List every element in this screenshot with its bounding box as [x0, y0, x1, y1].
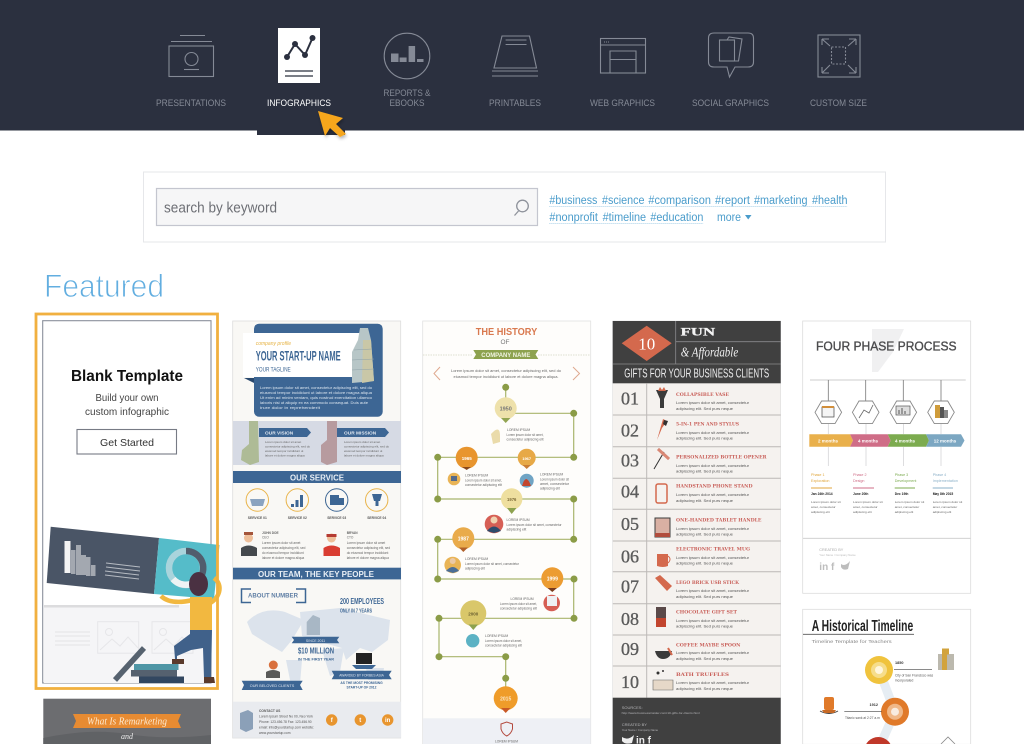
- icon: reports and ebooks: [384, 33, 430, 79]
- timeline captions: amet, consectetur: [540, 482, 570, 486]
- icon: custom size: [818, 35, 860, 77]
- label: web graphics: WEB GRAPHICS: [590, 98, 655, 109]
- keyword tags: #business: [549, 195, 598, 207]
- team band: OUR TEAM, THE KEY PEOPLE: [258, 570, 375, 579]
- historical timeline title: Timeline Template for Teachers: [812, 639, 893, 644]
- icon: printables: [492, 36, 538, 76]
- hero panel: irure dolor in reprehenderit: [260, 406, 320, 410]
- row descriptions: Lorem ipsum dolor sit amet, consectetur: [676, 431, 750, 435]
- timeline captions: Lorem ipsum dolor sit amet,: [506, 433, 544, 437]
- timeline captions: LOREM IPSUM: [465, 474, 488, 478]
- phase columns: adipiscing elit: [853, 510, 872, 514]
- timeline captions: LOREM IPSUM: [510, 597, 534, 601]
- phase columns: Implementation: [933, 479, 958, 483]
- four phase title: FOUR PHASE PROCESS: [816, 339, 957, 354]
- four phase footer: CREATED BY: [819, 548, 844, 552]
- search field: [156, 188, 538, 226]
- team members: labore et dolore magna aliqua: [262, 556, 304, 560]
- hero panel: [243, 324, 383, 417]
- row descriptions: Lorem ipsum dolor sit amet, consectetur: [676, 589, 750, 593]
- year pins: 1950: [500, 406, 512, 412]
- row descriptions: Lorem ipsum dolor sit amet, consectetur: [676, 651, 750, 655]
- phase columns: amet, consectetur: [853, 505, 878, 509]
- phase columns: Design: [853, 479, 864, 483]
- statistic: ten million: IN THE FIRST YEAR: [298, 658, 334, 662]
- phase columns: [811, 473, 962, 514]
- label: infographics: INFOGRAPHICS: [267, 98, 331, 109]
- row descriptions: Lorem ipsum dolor sit amet, consectetur: [676, 619, 750, 623]
- phase icons: [810, 380, 966, 424]
- timeline captions: LOREM IPSUM: [540, 472, 563, 476]
- phase columns: May 8th 2015: [933, 492, 953, 496]
- vision and mission band: consectetur adipiscing elit, sed do: [344, 444, 389, 448]
- row descriptions: adipiscing elit. Sed purs neque: [676, 532, 733, 536]
- timeline captions: consectetur adipiscing elit: [500, 606, 537, 610]
- hero panel: YOUR TAGLINE: [256, 368, 291, 374]
- service icons: [246, 489, 388, 520]
- statistic: employees: 200 EMPLOYEES: [340, 597, 384, 606]
- card: four phase process: [803, 321, 971, 593]
- historical timeline title: [803, 618, 914, 644]
- statistic: ten million: $10 MILLION: [298, 646, 334, 655]
- year pins: 1999: [547, 576, 558, 582]
- card: start-up infographic: [233, 321, 401, 738]
- gifts footer: CREATED BY: [622, 722, 647, 727]
- timeline captions: Lorem ipsum dolor sit amet,: [500, 602, 537, 606]
- ribbon: beloved clients: OUR BELOVED CLIENTS: [250, 684, 295, 688]
- event: 1912: Titanic sank at 2:27 a.m: [845, 716, 880, 720]
- service icons: SERVICE 01: [248, 516, 267, 520]
- row numbers: 04: [621, 482, 639, 502]
- four phase footer: in f: [819, 562, 835, 573]
- world map: [247, 608, 390, 690]
- row numbers: 01: [621, 388, 639, 408]
- gifts footer: Your Name / Company Name: [622, 728, 659, 732]
- vision and mission band: [233, 421, 401, 465]
- get started button: [77, 430, 176, 454]
- search panel: [144, 172, 886, 242]
- phase duration arrow bar: [809, 424, 964, 466]
- contact footer: email: info@yourstartup.com website:: [259, 726, 314, 730]
- row descriptions: Lorem ipsum dolor sit amet, consectetur: [676, 681, 750, 685]
- event: 1912: 1912: [870, 703, 878, 707]
- icon: infographics selected: [278, 28, 320, 83]
- icon: web graphics: [600, 38, 646, 73]
- row titles: COFFEE MAYBE SPOON: [676, 643, 741, 649]
- timeline captions: Lorem ipsum dolor sit: [540, 478, 569, 482]
- event: 1850: [894, 648, 954, 682]
- row numbers: 10: [621, 672, 639, 692]
- contact footer: in: [385, 718, 391, 724]
- row descriptions: Lorem ipsum dolor sit amet, consectetur: [676, 493, 750, 497]
- icon: social graphics: [708, 33, 754, 77]
- timeline captions: adipiscing elit: [506, 528, 526, 532]
- phase columns: amet, consectetur: [933, 505, 957, 509]
- row titles: [676, 392, 767, 678]
- phase columns: Phase 2: [853, 473, 867, 477]
- row titles: ELECTRONIC TRAVEL MUG: [676, 547, 750, 553]
- team band: [233, 568, 401, 579]
- year pins: [452, 397, 563, 713]
- history heading: Lorem ipsum dolor sit amet, consectetur adipiscing elit, sed do: [451, 369, 561, 373]
- timeline path: [434, 384, 578, 698]
- timeline captions: Lorem ipsum dolor sit amet, consectetur: [506, 523, 562, 527]
- keyword tags: #report: [715, 195, 751, 207]
- phase columns: Phase 4: [933, 473, 946, 477]
- our service band: [233, 471, 401, 483]
- year pins: 1976: [507, 497, 517, 502]
- service icons: SERVICE 02: [288, 516, 307, 520]
- timeline ribbon and circles: [864, 656, 909, 744]
- row descriptions: adipiscing elit. Sed purs neque: [676, 657, 733, 661]
- card: remarketing template: and: [121, 732, 134, 741]
- phase columns: Dec 19th: [895, 492, 908, 496]
- illustration: shelf: [44, 605, 210, 683]
- row descriptions: Lorem ipsum dolor sit amet, consectetur: [676, 401, 750, 405]
- row numbers: 02: [621, 421, 639, 441]
- statistic: employees: [340, 597, 384, 614]
- row grid: [613, 383, 781, 698]
- timeline captions: LOREM IPSUM: [485, 634, 508, 638]
- row titles: COLLAPSIBLE VASE: [676, 392, 729, 398]
- four phase footer: [803, 538, 970, 573]
- phase duration arrow bar: 12 months: [934, 438, 957, 444]
- gifts header: & Affordable: [681, 346, 738, 361]
- search placeholder: search by keyword: [164, 200, 277, 216]
- phase columns: adipiscing elit: [895, 510, 913, 514]
- contact footer: Phone: 123.456.78 Fax: 123.456.90: [259, 720, 312, 724]
- timeline portraits: [444, 429, 560, 647]
- statistic: ten million: [292, 615, 339, 662]
- contact footer: f: [331, 718, 334, 724]
- card: ten gifts: [613, 321, 781, 744]
- team members: BRYAN: [347, 531, 358, 535]
- illustration: dashboard panel: [47, 527, 220, 599]
- illustration: books and stick: [115, 648, 184, 683]
- gifts footer: SOURCES:: [622, 705, 643, 710]
- keyword tags: more: [717, 212, 741, 224]
- timeline captions: LOREM IPSUM: [506, 518, 530, 522]
- row titles: PERSONALIZED BOTTLE OPENER: [676, 455, 767, 461]
- gifts header: FUN: [681, 325, 716, 339]
- card: blank template: [43, 321, 220, 683]
- row descriptions: adipiscing elit. Sed purs neque: [676, 562, 733, 566]
- team members: do eiusmod tempor incididunt: [347, 551, 388, 555]
- label: custom size: CUSTOM SIZE: [810, 98, 867, 109]
- gifts footer: http://www.businessinsider.com/10-gifts-for-clients.html: [622, 711, 700, 715]
- history heading: THE HISTORY: [476, 326, 537, 338]
- ribbon: awarded: AS THE MOST PROMISING: [340, 681, 383, 685]
- phase columns: Exploration: [811, 479, 829, 483]
- statistic: ten million: SINCE 2011: [306, 639, 325, 643]
- gifts header: GIFTS FOR YOUR BUSINESS CLIENTS: [624, 366, 769, 381]
- history heading: [423, 326, 590, 380]
- hero panel: YOUR START-UP NAME: [256, 348, 341, 364]
- label: reports and ebooks: [384, 88, 431, 109]
- service icons: SERVICE 03: [327, 516, 346, 520]
- gifts header: 10: [638, 334, 655, 354]
- team members: JOHN DOE: [262, 531, 279, 535]
- row titles: LEGO BRICK USB STICK: [676, 580, 740, 586]
- timeline captions: [465, 428, 570, 648]
- row numbers: 08: [621, 609, 639, 629]
- row descriptions: adipiscing elit. Sed purs neque: [676, 595, 733, 599]
- gifts footer: [613, 698, 781, 744]
- event: 1850: City of San Francisco was: [895, 674, 933, 678]
- card: remarketing template: What Is Remarketing: [87, 716, 167, 728]
- label: printables: PRINTABLES: [489, 98, 541, 109]
- row descriptions: adipiscing elit. Sed purs neque: [676, 687, 733, 691]
- icon: house: [941, 737, 955, 744]
- hero panel: laboris nisi ut aliquip ex ea commodo consequat. Duis aute: [260, 401, 368, 405]
- row numbers: 06: [621, 546, 639, 566]
- hero panel: eiusmod tempor incididunt ut labore et dolore magna aliqua: [260, 391, 372, 395]
- vision and mission band: consectetur adipiscing elit, sed do: [265, 444, 310, 448]
- year pins: 2000: [468, 612, 479, 616]
- row descriptions: Lorem ipsum dolor sit amet, consectetur: [676, 556, 750, 560]
- team members: consectetur adipiscing elit, sed: [262, 546, 306, 550]
- vision and mission band: eiusmod tempor incididunt ut: [265, 449, 304, 453]
- row descriptions: Lorem ipsum dolor sit amet, consectetur: [676, 527, 750, 531]
- label: social graphics: SOCIAL GRAPHICS: [692, 98, 769, 109]
- heading: featured: Featured: [44, 268, 164, 304]
- year pins: 1967: [522, 456, 532, 461]
- row descriptions: adipiscing elit. Sed purs neque: [676, 499, 733, 503]
- gifts header: [613, 321, 781, 383]
- get started button: Get Started: [100, 437, 154, 449]
- vision and mission band: OUR VISION: [265, 430, 294, 436]
- ribbon: awarded: START-UP OF 2012: [347, 686, 377, 690]
- row titles: CHOCOLATE GIFT SET: [676, 609, 737, 615]
- orange selection frame: [36, 314, 218, 688]
- ribbon: awarded: [332, 653, 392, 690]
- row numbers: 03: [621, 451, 639, 471]
- team members: do eiusmod tempor incididunt: [262, 551, 304, 555]
- contact footer: www.yourstartup.com: [259, 731, 291, 735]
- row titles: HANDSTAND PHONE STAND: [676, 484, 752, 490]
- label: reports and ebooks: REPORTS &: [384, 88, 431, 99]
- row numbers: [621, 388, 639, 692]
- statistic: employees: ONLY IN 7 YEARS: [340, 608, 372, 614]
- phase columns: Jan 24th 2014: [811, 492, 833, 496]
- phase duration arrow bar: 4 months: [858, 438, 878, 444]
- arrow: orange cursor: [318, 111, 346, 137]
- phase columns: amet, consectetur: [811, 505, 836, 509]
- service icons: SERVICE 04: [367, 516, 386, 520]
- row titles: BATH TRUFFLES: [676, 672, 730, 678]
- team members: CEO: [262, 536, 269, 540]
- shield footer: [495, 722, 518, 744]
- year pins: 1965: [462, 456, 472, 461]
- ribbon: beloved clients: [242, 660, 303, 690]
- header bar: [0, 0, 1024, 135]
- event: 1850: 1850: [895, 661, 903, 665]
- history heading: eiusmod tempor incididunt ut labore et dolore magna aliqua.: [454, 375, 558, 379]
- label: reports and ebooks: EBOOKS: [390, 98, 424, 109]
- timeline captions: LOREM IPSUM: [507, 428, 530, 432]
- blank template description: [85, 392, 169, 418]
- event: 1850: incorporated: [895, 678, 913, 682]
- hero panel: company profile: [256, 341, 291, 347]
- phase columns: amet, consectetur: [895, 505, 919, 509]
- keyword tags: [549, 195, 848, 224]
- blank template description: Build your own: [96, 392, 159, 404]
- team members: CTO: [347, 536, 354, 540]
- phase duration arrow bar: 2 months: [818, 438, 838, 444]
- hero panel: Ut enim ad minim veniam, quis nostrud exercitation ullamco: [260, 396, 372, 400]
- team members: consectetur adipiscing elit, sed: [347, 546, 390, 550]
- vision and mission band: labore et dolore magna aliqua: [344, 454, 384, 458]
- hero panel: Lorem ipsum dolor sit amet, consectetur adipiscing elit, sed do: [260, 386, 372, 390]
- vision and mission band: eiusmod tempor incididunt ut: [344, 449, 383, 453]
- phase duration arrow bar: 4 months: [895, 438, 915, 444]
- vision and mission band: Lorem ipsum dolor sit amet: [344, 440, 380, 444]
- phase columns: Phase 1: [811, 473, 825, 477]
- year pins: 1987: [458, 536, 469, 542]
- row titles: 5-IN-1 PEN AND STYLUS: [676, 421, 739, 427]
- history heading: OF: [500, 339, 510, 346]
- keyword tags: #nonprofit: [549, 212, 599, 224]
- vision and mission band: Lorem ipsum dolor sit amet: [265, 440, 301, 444]
- team members: labore et dolore magna aliqua: [347, 556, 389, 560]
- row descriptions: [676, 401, 750, 691]
- ribbon: awarded: AWARDED BY FORBES ASIA: [339, 674, 385, 678]
- contact footer: t: [359, 718, 361, 724]
- timeline captions: consectetur adipiscing elit: [506, 438, 544, 442]
- team members: [241, 531, 390, 560]
- phase columns: June 20th: [853, 492, 868, 496]
- team members: Lorem ipsum dolor sit amet: [262, 541, 301, 545]
- row numbers: 05: [621, 514, 639, 534]
- row descriptions: Lorem ipsum dolor sit amet, consectetur: [676, 464, 750, 468]
- phase columns: adipiscing elit: [933, 510, 951, 514]
- keyword tags: #science: [602, 195, 644, 207]
- history heading: COMPANY NAME: [481, 353, 530, 359]
- timeline captions: Lorem ipsum dolor sit amet, consectetur: [465, 562, 520, 566]
- row numbers: 07: [621, 576, 639, 596]
- keyword tags: #timeline: [603, 212, 646, 224]
- shield footer: LOREM IPSUM: [495, 740, 518, 744]
- four phase footer: Your Name / Company Name: [819, 553, 856, 557]
- card: history timeline: [423, 321, 591, 744]
- phase columns: Development: [895, 479, 916, 483]
- vision and mission band: labore et dolore magna aliqua: [265, 454, 305, 458]
- label: presentations: PRESENTATIONS: [156, 98, 226, 109]
- about number bracket: ABOUT NUMBER: [248, 592, 298, 600]
- row descriptions: adipiscing elit. Sed purs neque: [676, 470, 733, 474]
- keyword tags: #marketing: [754, 195, 808, 207]
- about number bracket: [242, 589, 306, 602]
- icon: magnifier: [514, 200, 528, 216]
- phase columns: Lorem ipsum dolor sit: [933, 500, 962, 504]
- row titles: ONE-HANDED TABLET HANDLE: [676, 518, 762, 524]
- timeline captions: Lorem ipsum dolor sit amet,: [465, 478, 502, 482]
- timeline captions: Lorem ipsum dolor sit amet,: [485, 639, 522, 643]
- row descriptions: adipiscing elit. Sed purs neque: [676, 407, 733, 411]
- contact footer: CONTACT US: [259, 709, 281, 713]
- row descriptions: adipiscing elit. Sed purs neque: [676, 436, 733, 440]
- row numbers: 09: [621, 639, 639, 659]
- illustration: person: [161, 572, 220, 683]
- timeline captions: consectetur adipiscing elit: [485, 644, 522, 648]
- event: 1912: [820, 697, 882, 720]
- keyword tags: #health: [812, 195, 848, 207]
- timeline captions: adipiscing elit: [540, 486, 560, 490]
- historical timeline title: A Historical Timeline: [812, 618, 913, 635]
- keyword tags: #comparison: [648, 195, 711, 207]
- icon: presentations: [169, 36, 214, 76]
- timeline captions: LOREM IPSUM: [465, 557, 488, 561]
- year pins: 2015: [500, 696, 511, 702]
- vision and mission band: OUR MISSION: [344, 430, 377, 436]
- phase columns: Lorem ipsum dolor sit: [853, 500, 883, 504]
- contact footer: Lorem Ipsum Street No 00, Neo York: [259, 714, 313, 718]
- row icons: [653, 387, 673, 690]
- phase columns: Lorem ipsum dolor sit: [811, 500, 841, 504]
- card: historical timeline: [803, 609, 971, 744]
- phase columns: Phase 3: [895, 473, 908, 477]
- phase columns: adipiscing elit: [811, 510, 830, 514]
- contact footer: [233, 702, 401, 738]
- blank template description: custom infographic: [85, 406, 169, 418]
- row descriptions: adipiscing elit. Sed purs neque: [676, 624, 733, 628]
- our service band: OUR SERVICE: [290, 473, 345, 482]
- timeline captions: adipiscing elit: [465, 566, 485, 570]
- team members: Lorem ipsum dolor sit amet: [347, 541, 385, 545]
- keyword tags: #education: [650, 212, 703, 224]
- timeline captions: consectetur adipiscing elit: [465, 483, 502, 487]
- blank template title: Blank Template: [71, 368, 183, 385]
- phase columns: Lorem ipsum dolor sit: [895, 500, 924, 504]
- card: remarketing template: [43, 699, 211, 744]
